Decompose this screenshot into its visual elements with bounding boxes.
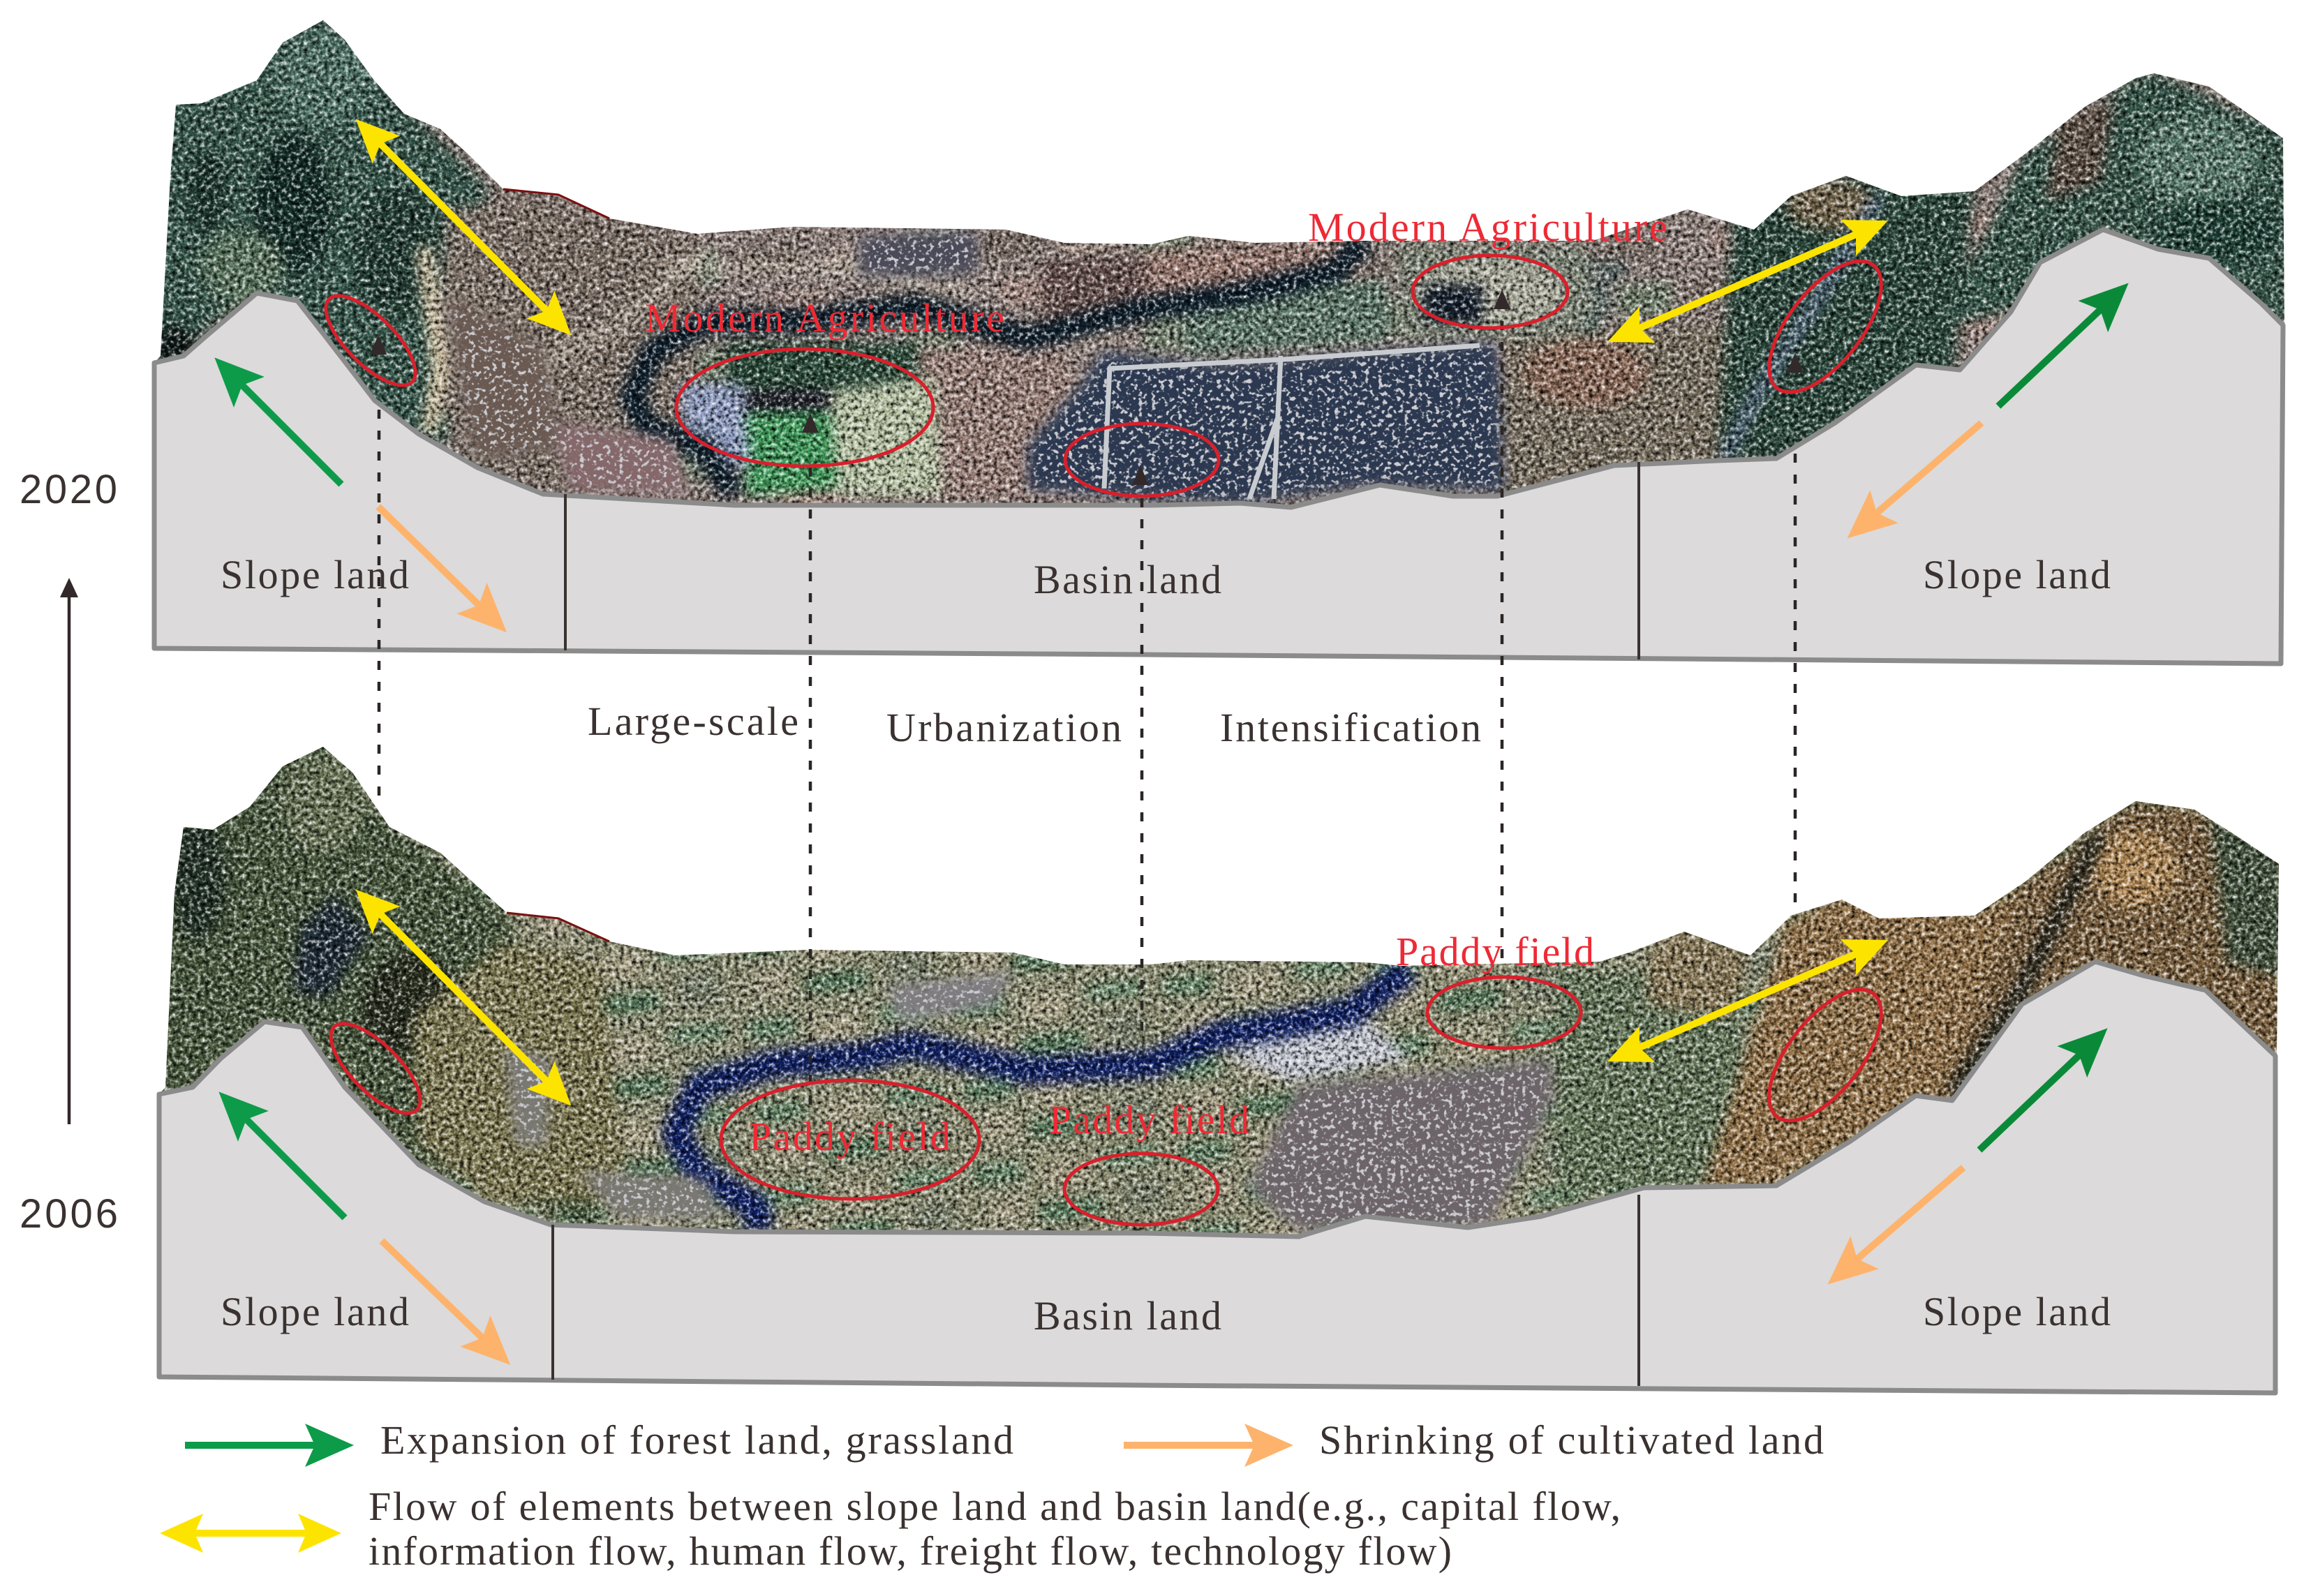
land type labels 2020: Slope land <box>221 552 409 597</box>
red ellipses 2006 <box>318 971 1902 1225</box>
gray terrain block: 2020 <box>154 230 2283 664</box>
red labels 2020 <box>645 204 1667 341</box>
legend: flow of elements <box>195 1484 1621 1574</box>
dark red edge slivers <box>507 913 609 941</box>
panel: 2006 cross-section <box>140 733 2297 1393</box>
land type labels 2006: Basin land <box>1034 1293 1221 1338</box>
panel: 2020 cross-section <box>140 0 2297 664</box>
legend: flow of elements: Flow of elements between slope land and basin land(e.g., capital flow, <box>369 1484 1621 1529</box>
settlements 2020 <box>447 232 1504 503</box>
timeline arrow and years: 2006 <box>20 1191 118 1237</box>
red labels 2020: Modern Agriculture <box>1308 204 1667 250</box>
satellite terrain 2006 <box>140 733 2297 1263</box>
legend: cultivated land shrinking: Shrinking of cultivated land <box>1319 1417 1824 1463</box>
process labels <box>588 699 1481 750</box>
red labels 2006: Paddy field <box>1049 1097 1249 1142</box>
land type labels 2020: Basin land <box>1034 557 1221 602</box>
timeline arrow and years: 2020 <box>20 467 117 512</box>
legend: flow of elements: information flow, human flow, freight flow, technology flow) <box>369 1528 1452 1574</box>
settlements 2006 <box>506 973 1552 1230</box>
legend <box>185 1417 1824 1574</box>
red labels 2006: Paddy field <box>1396 929 1594 974</box>
red ellipses and markers 2020 <box>313 243 1902 496</box>
red labels 2020: Modern Agriculture <box>645 295 1004 341</box>
red labels 2006 <box>749 929 1594 1159</box>
land type labels 2020 <box>221 552 2111 602</box>
divider: slope and basin left 2020 <box>564 494 567 650</box>
land type labels 2020: Slope land <box>1923 552 2111 597</box>
land type labels 2006: Slope land <box>1923 1289 2111 1334</box>
gray terrain block: 2006 <box>159 962 2275 1393</box>
process labels: Urbanization <box>886 705 1122 750</box>
divider: slope and basin left 2006 <box>551 1225 554 1380</box>
divider: basin and slope right 2020 <box>1637 462 1640 659</box>
dashed connector lines <box>379 321 1795 1110</box>
legend: forest expansion: Expansion of forest land, grassland <box>380 1417 1013 1463</box>
town streets 2020 <box>1104 345 1480 499</box>
land type labels 2006 <box>221 1289 2111 1338</box>
process labels: Large-scale <box>588 699 798 744</box>
timeline arrow and years <box>20 467 118 1237</box>
process labels: Intensification <box>1220 705 1481 750</box>
arrows 2006 <box>246 914 2079 1338</box>
satellite terrain 2020 <box>140 0 2297 530</box>
red labels 2006: Paddy field <box>749 1114 951 1159</box>
dark red edge slivers <box>503 189 609 218</box>
arrows 2020 <box>242 144 2100 605</box>
land type labels 2006: Slope land <box>221 1289 409 1334</box>
divider: basin and slope right 2006 <box>1637 1195 1640 1386</box>
